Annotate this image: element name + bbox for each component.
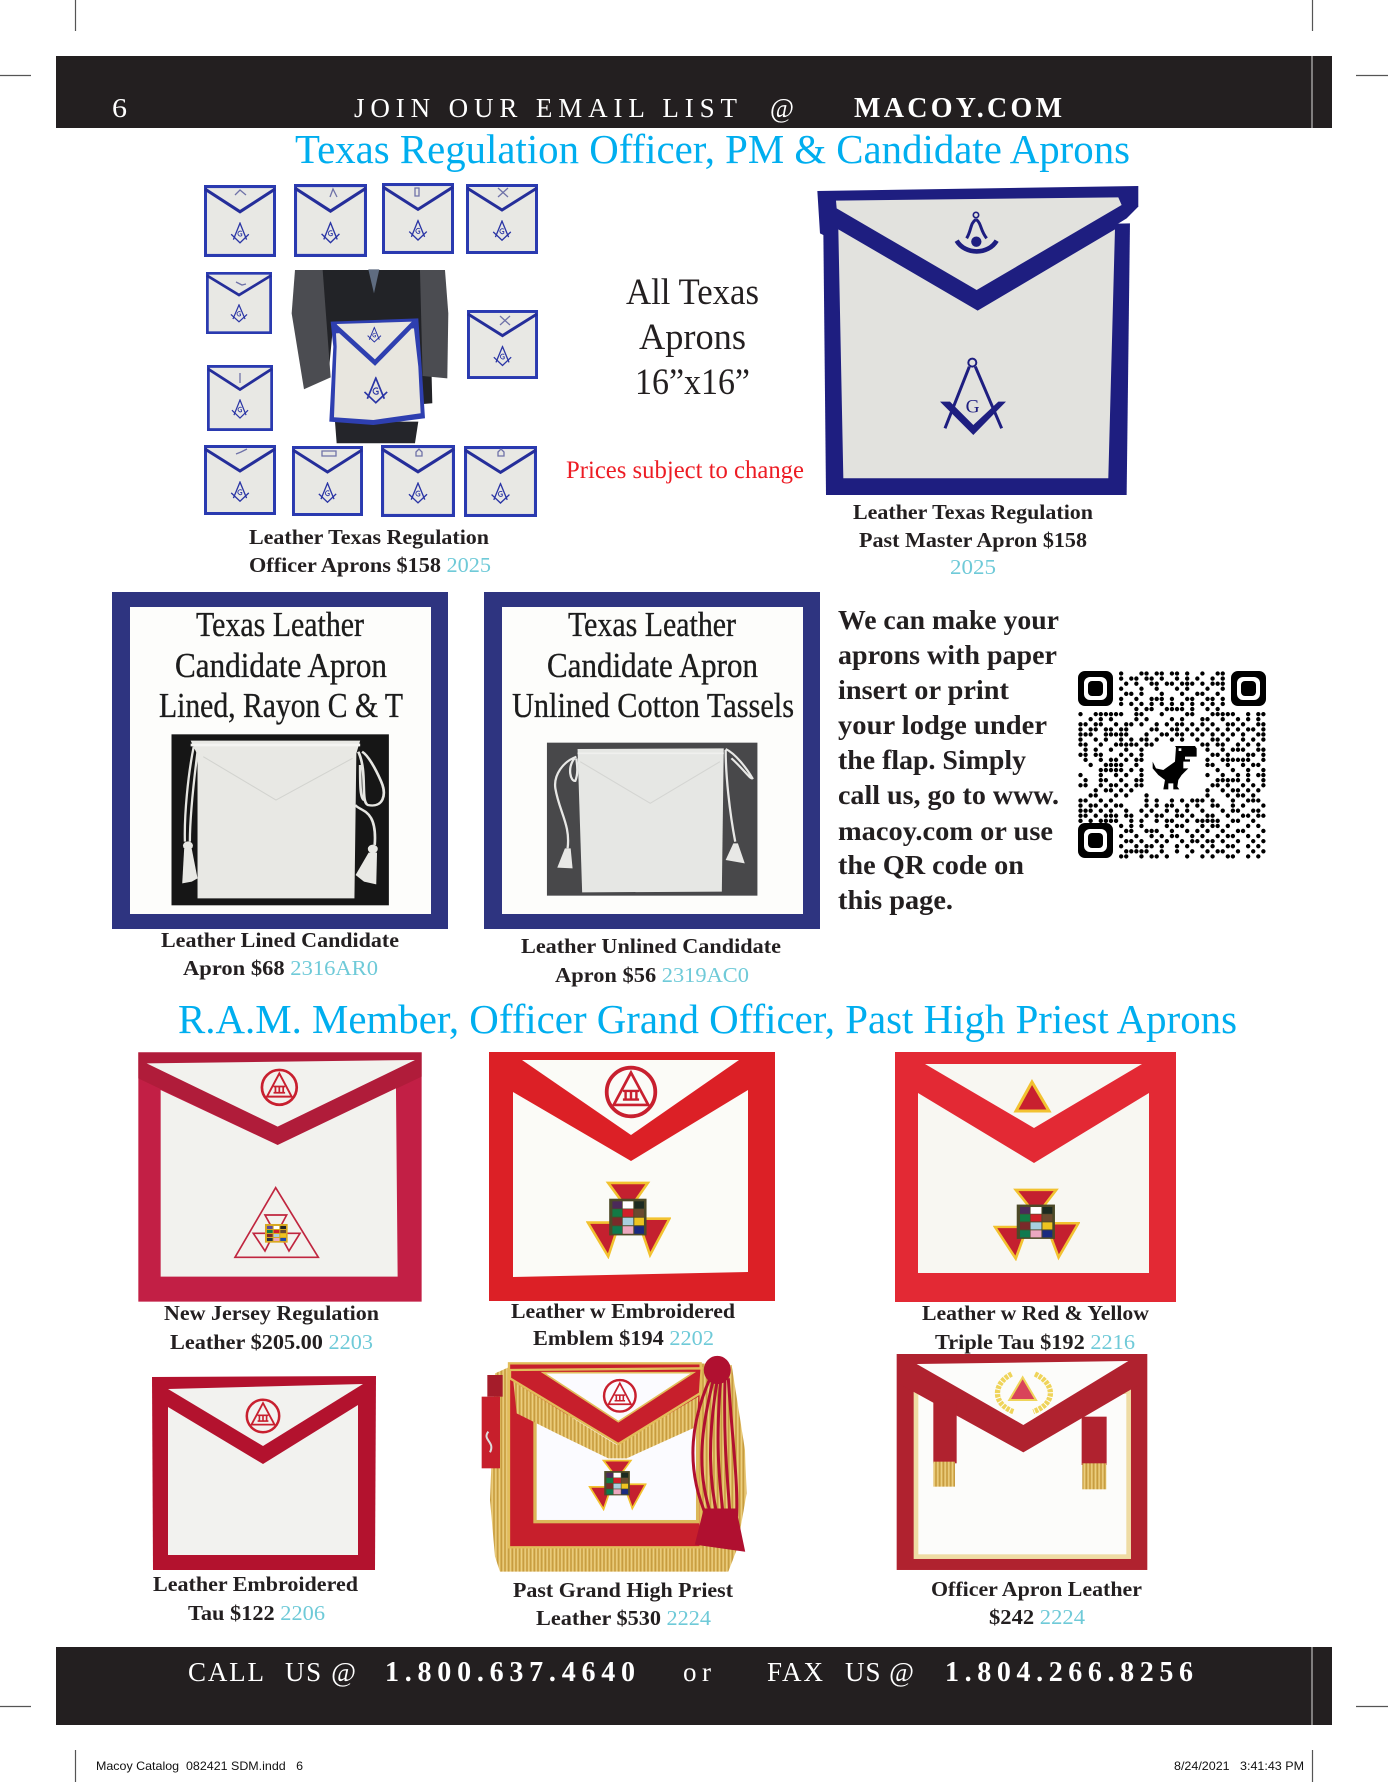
text block: custom printing: We can make your (838, 605, 1059, 635)
apron: New Jersey regulation (138, 1052, 422, 1302)
apron: past grand high priest (482, 1357, 747, 1572)
caption: past master apron: Leather Texas Regulation (853, 500, 1093, 524)
caption: officer aprons: Officer Aprons $158 2025 (249, 553, 491, 577)
man in suit wearing apron (292, 269, 448, 443)
panel heading: Texas Leather (196, 605, 364, 644)
caption: embroidered emblem: Emblem $194 2202 (533, 1326, 714, 1350)
panel heading: Texas Leather (568, 605, 736, 644)
caption: triple tau: Leather w Red & Yellow (922, 1301, 1150, 1325)
cord and tassel (693, 1357, 743, 1550)
caption: lined candidate: Leather Lined Candidate (161, 928, 399, 952)
size note: Aprons (639, 317, 746, 358)
caption: officer aprons (249, 525, 491, 577)
emblem: yellow triangle (1016, 1082, 1049, 1111)
caption: New Jersey: Leather $205.00 2203 (170, 1330, 373, 1354)
caption: embroidered tau (153, 1572, 358, 1625)
text block: custom printing: insert or print (838, 675, 1009, 705)
officer aprons photo collage (205, 185, 537, 515)
emblem: past master (957, 212, 997, 251)
call label: CALL (188, 1657, 264, 1687)
text block: custom printing: call us, go to www. (838, 780, 1059, 810)
caption: past master apron: Past Master Apron $158 (859, 528, 1087, 552)
caption: unlined candidate: Leather Unlined Candidate (521, 934, 781, 958)
emblem: square and compass: G (966, 397, 980, 418)
emblem: wreath (997, 1374, 1050, 1412)
text block: custom printing (838, 605, 1059, 915)
icon: dinosaur (1153, 746, 1197, 789)
panel heading: Lined, Rayon C & T (159, 686, 403, 725)
footer bar (56, 1647, 1332, 1725)
slug: file name: Macoy Catalog 082421 SDM.indd 6 (96, 1759, 303, 1773)
phone number: 1.800.637.4640 (385, 1657, 635, 1688)
past master apron (817, 186, 1138, 495)
fax number: 1.804.266.8256 (945, 1657, 1193, 1688)
caption: past master apron: 2025 (950, 555, 996, 579)
text block: custom printing: your lodge under (838, 710, 1047, 740)
emblem: square and compass (940, 359, 1006, 435)
apron: leather embroidered tau (152, 1376, 376, 1570)
caption: past master apron (853, 500, 1093, 579)
title: Texas aprons: Texas Regulation Officer, PM & Candidate Aprons (295, 126, 1130, 172)
caption: past grand high priest: Leather $530 2224 (536, 1606, 712, 1630)
slug: date: 8/24/2021 3:41:43 PM (1174, 1759, 1304, 1773)
at sign: @ (770, 93, 794, 123)
size note: 16”x16” (635, 362, 750, 403)
caption: past grand high priest (513, 1578, 733, 1630)
panel heading: Candidate Apron (547, 646, 758, 685)
caption: officer apron: Officer Apron Leather (931, 1577, 1142, 1601)
apron: officer leather (897, 1354, 1147, 1570)
fax label: FAX (767, 1657, 824, 1687)
text block: custom printing: aprons with paper (838, 640, 1057, 670)
panel heading: Candidate Apron (175, 646, 387, 685)
caption: embroidered tau: Tau $122 2206 (188, 1601, 325, 1625)
photo: lined apron (172, 734, 389, 905)
call label (188, 1657, 356, 1687)
price note: Prices subject to change (566, 457, 804, 484)
caption: New Jersey (164, 1301, 379, 1354)
email list text: JOIN OUR EMAIL LIST (354, 93, 738, 123)
photo: unlined apron (547, 743, 757, 896)
text block: custom printing: this page. (838, 885, 953, 915)
caption: officer apron: $242 2224 (989, 1605, 1086, 1629)
panel heading (512, 605, 794, 725)
title: R.A.M. aprons: R.A.M. Member, Officer Grand Officer, Past High Priest Aprons (178, 996, 1237, 1042)
or: or (683, 1657, 711, 1687)
panel heading (159, 605, 403, 725)
strap tab (482, 1375, 503, 1468)
panel: unlined candidate apron (484, 592, 820, 929)
caption: officer apron (931, 1577, 1142, 1629)
fax label (767, 1657, 914, 1687)
caption: lined candidate (161, 928, 399, 980)
caption: unlined candidate (521, 934, 781, 987)
website: MACOY.COM (854, 93, 1062, 124)
caption: triple tau (922, 1301, 1150, 1354)
size note (626, 272, 759, 403)
page number: 6 (112, 93, 127, 123)
caption: lined candidate: Apron $68 2316AR0 (183, 956, 378, 980)
caption: unlined candidate: Apron $56 2319AC0 (555, 963, 749, 987)
caption: embroidered emblem (511, 1299, 735, 1350)
panel heading: Unlined Cotton Tassels (512, 686, 794, 725)
data dots (1080, 674, 1263, 856)
call label: US @ (285, 1657, 356, 1687)
panel: lined candidate apron (112, 592, 448, 929)
text block: custom printing: the flap. Simply (838, 745, 1027, 775)
finder squares (1078, 671, 1266, 858)
size note: All Texas (626, 272, 759, 313)
apron: red and yellow triple tau (895, 1052, 1176, 1302)
text block: custom printing: macoy.com or use (838, 816, 1053, 846)
caption: officer aprons: Leather Texas Regulation (249, 525, 489, 549)
caption: embroidered emblem: Leather w Embroidered (511, 1299, 735, 1323)
caption: past grand high priest: Past Grand High Priest (513, 1578, 733, 1602)
apron: leather with embroidered emblem (489, 1052, 775, 1301)
small aprons (205, 185, 537, 515)
emblem: triangle (235, 1188, 318, 1257)
header bar (56, 56, 1332, 128)
caption: triple tau: Triple Tau $192 2216 (935, 1330, 1135, 1354)
fax label: US @ (845, 1657, 914, 1687)
QR code (1078, 671, 1266, 858)
caption: embroidered tau: Leather Embroidered (153, 1572, 358, 1596)
text block: custom printing: the QR code on (838, 850, 1024, 880)
caption: New Jersey: New Jersey Regulation (164, 1301, 379, 1325)
